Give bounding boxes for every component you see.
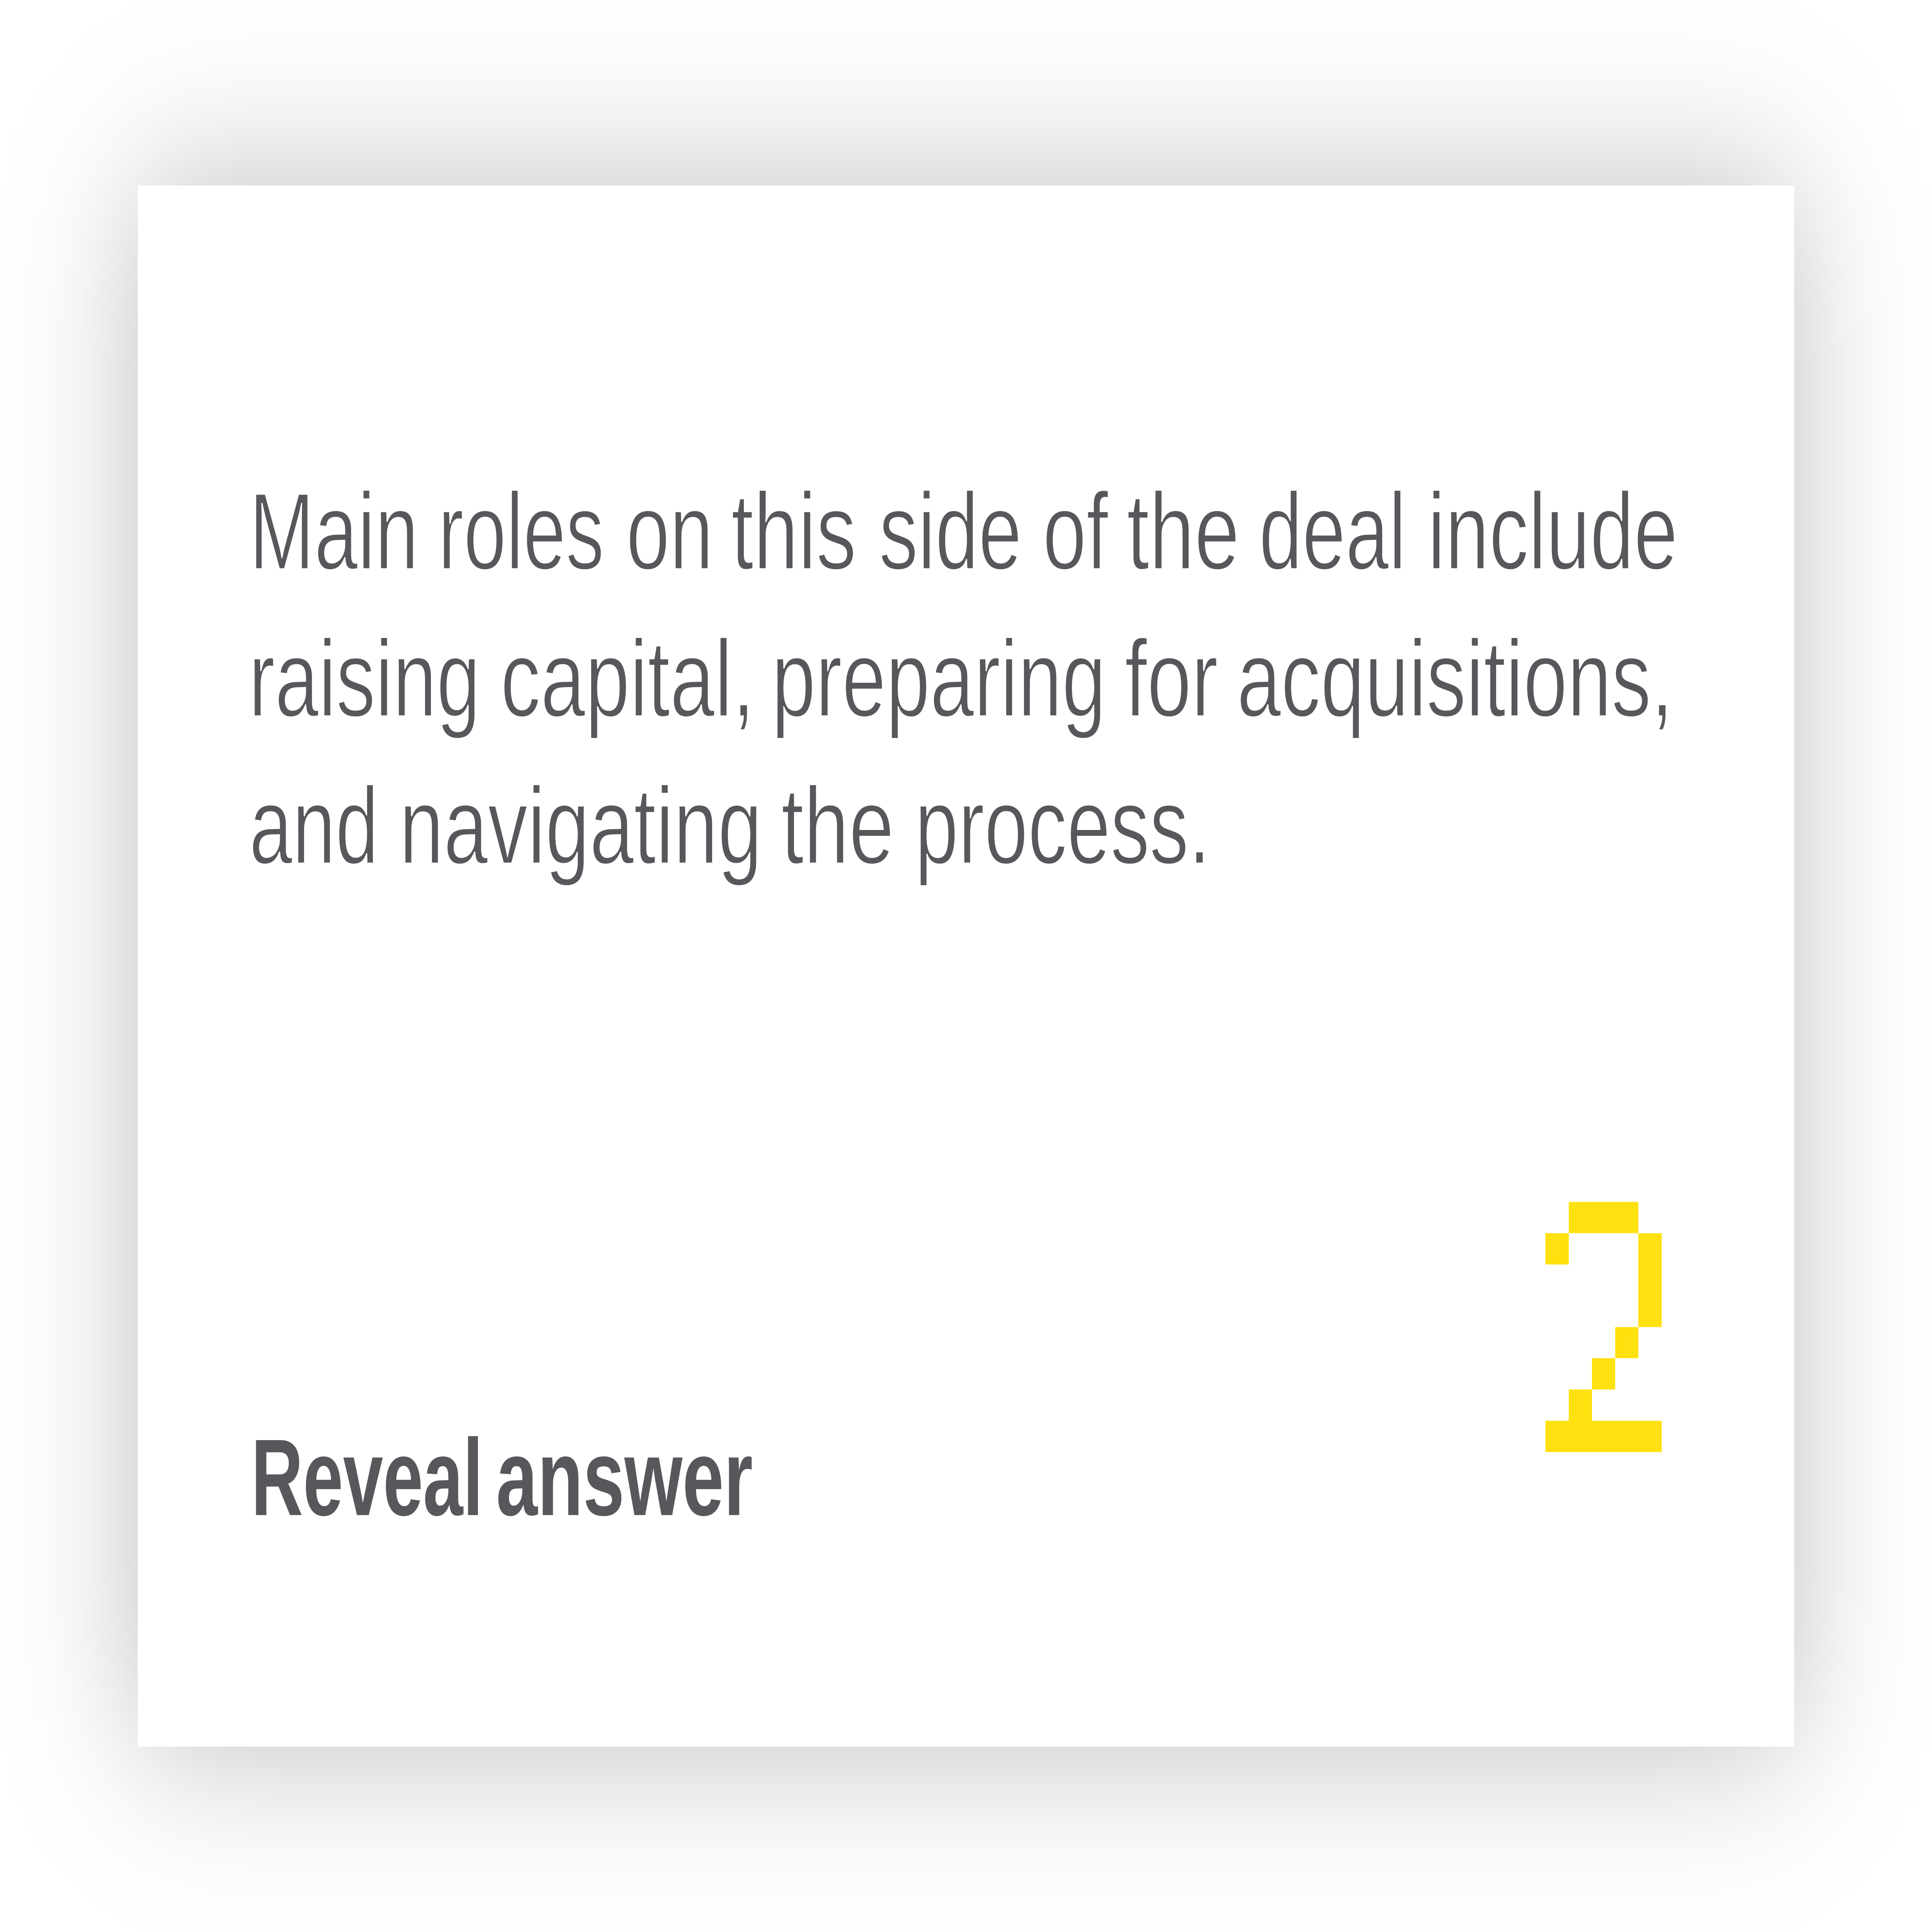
text block: card statement: the: [1127, 470, 1240, 592]
icon: yellow pixel numeral 2: [1546, 1202, 1662, 1452]
text block: card statement: acquisitions,: [1237, 617, 1673, 740]
text block: card statement: for: [1125, 617, 1218, 739]
text block: card statement: process.: [915, 765, 1210, 887]
text block: card statement: side: [879, 470, 1022, 592]
text block: card statement: of: [1043, 470, 1109, 592]
text block: card statement: [249, 470, 1678, 887]
button label: reveal answer: [251, 1417, 753, 1538]
text block: card statement: the: [781, 765, 894, 886]
button label: reveal answer: Reveal: [251, 1417, 483, 1538]
text block: card statement: preparing: [772, 617, 1106, 740]
text block: card statement: this: [731, 470, 856, 592]
text block: card statement: Main: [249, 470, 418, 592]
card surface: [138, 185, 1794, 1747]
text block: card statement: capital,: [500, 617, 755, 740]
text block: card statement: on: [626, 470, 713, 592]
text block: card statement: roles: [438, 470, 604, 592]
text block: card statement: deal: [1259, 470, 1406, 592]
text block: card statement: raising: [249, 617, 480, 740]
text block: card statement: navigating: [400, 765, 762, 887]
button label: reveal answer: answer: [496, 1417, 753, 1538]
text block: card statement: include: [1428, 470, 1678, 592]
text block: card statement: and: [249, 765, 379, 886]
